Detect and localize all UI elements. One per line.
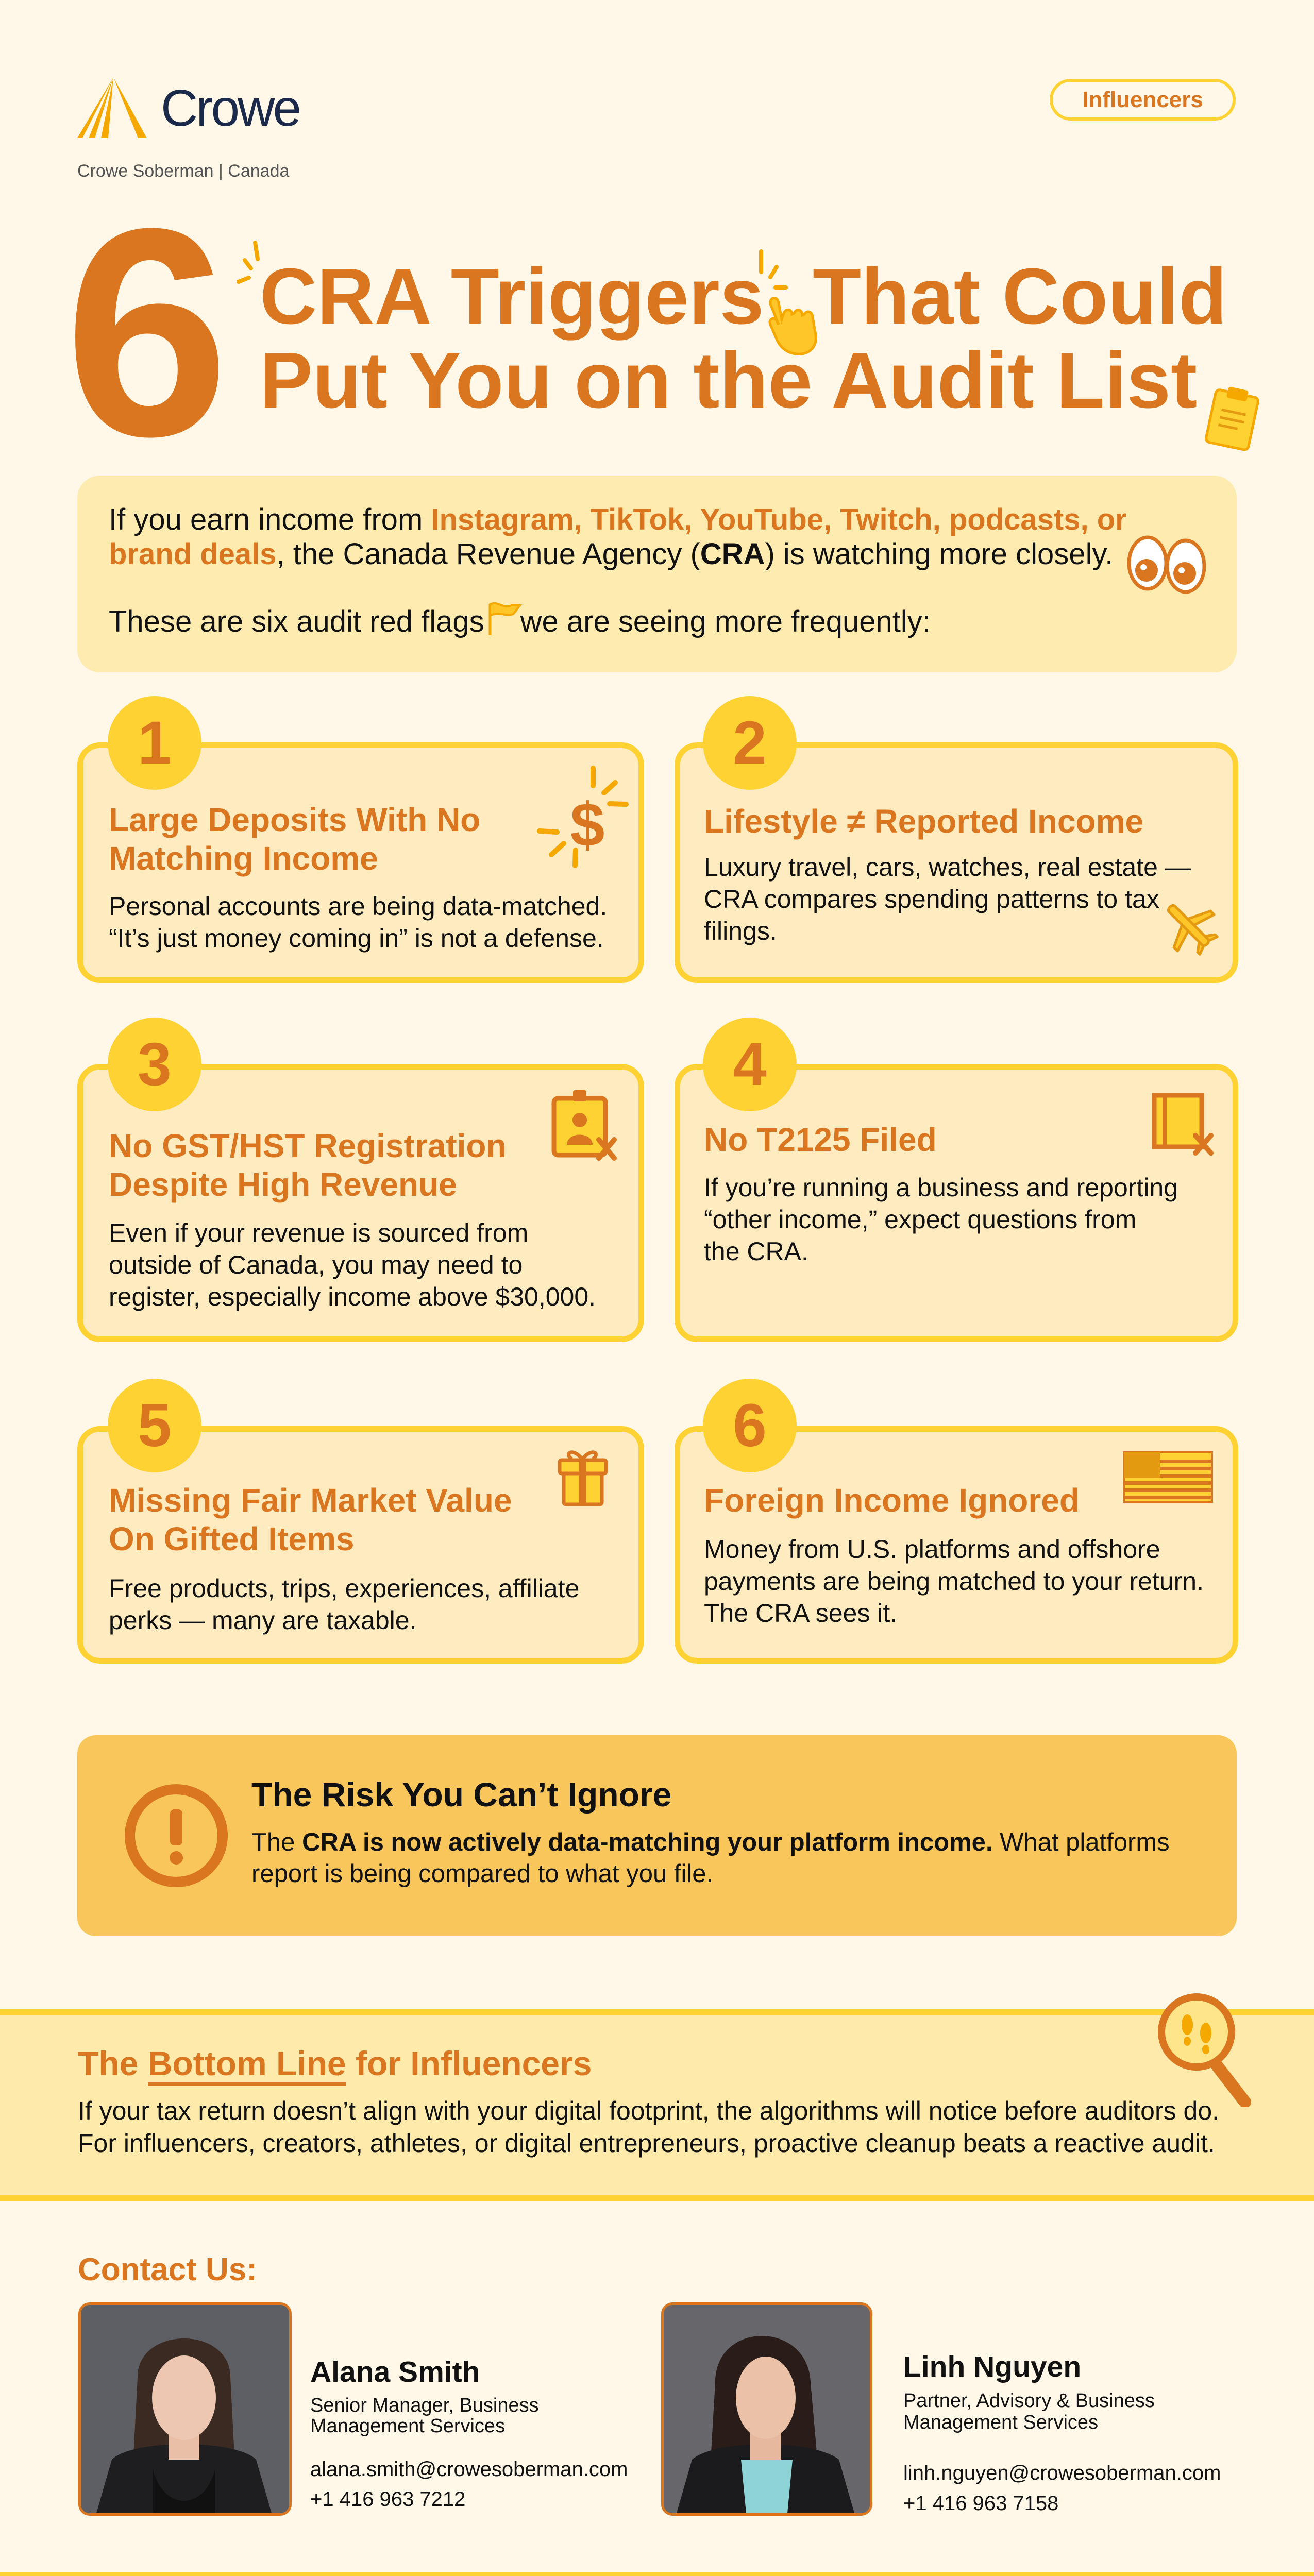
big number 6: 6	[64, 166, 229, 498]
panel: bottom line	[0, 2009, 1314, 2201]
contact: Alana Smith	[78, 2302, 645, 2516]
risk body: report is being compared to what you file.	[251, 1860, 713, 1888]
card 2 title: Lifestyle ≠ Reported Income	[704, 803, 1143, 840]
photo: Linh	[661, 2302, 872, 2516]
logo: Crowe	[77, 77, 299, 138]
panel: card 5	[77, 1426, 644, 1664]
card 1 body	[109, 892, 607, 953]
role Linh: Partner, Advisory & Business	[903, 2390, 1155, 2412]
badge 4: 4	[733, 1030, 767, 1098]
badge 4	[703, 1018, 797, 1111]
card 5 title: On Gifted Items	[109, 1520, 355, 1557]
contact details Alana: +1 416 963 7212	[310, 2488, 465, 2511]
name Linh: Linh Nguyen	[903, 2350, 1081, 2383]
card 1 title: Large Deposits With No	[109, 801, 480, 838]
card 6 title: Foreign Income Ignored	[704, 1482, 1080, 1519]
badge 6	[703, 1379, 797, 1472]
card 5 body	[109, 1574, 579, 1635]
badge 5	[108, 1379, 201, 1472]
card 1 body: Personal accounts are being data-matched.	[109, 892, 607, 921]
icon: document with x	[1152, 1093, 1214, 1156]
card 3 title: Despite High Revenue	[109, 1166, 457, 1203]
title line 2: Put You on the Audit List	[260, 336, 1197, 425]
badge 3: 3	[138, 1030, 172, 1098]
panel: card 4	[675, 1064, 1238, 1342]
card 6 body: The CRA sees it.	[704, 1599, 897, 1628]
card 1 title: Matching Income	[109, 840, 378, 877]
bottom line body: For influencers, creators, athletes, or digital entrepreneurs, proactive cleanup beats a reactive audit.	[78, 2129, 1215, 2158]
icon: magnifier with footprints	[1154, 1989, 1257, 2107]
tag: Influencers: Influencers	[1082, 87, 1203, 112]
badge 6: 6	[733, 1392, 767, 1460]
panel: card 6	[675, 1426, 1238, 1664]
card 3 body: register, especially income above $30,000.	[109, 1282, 596, 1311]
card 5 title: Missing Fair Market Value	[109, 1482, 512, 1519]
icon: clipboard	[1205, 387, 1259, 451]
name Alana: Alana Smith	[310, 2355, 480, 2388]
card 4 body: “other income,” expect questions from	[704, 1205, 1136, 1234]
role Alana: Senior Manager, Business	[310, 2395, 539, 2416]
card 6 body	[704, 1535, 1204, 1628]
card 3 body: outside of Canada, you may need to	[109, 1250, 523, 1279]
contact: Linh Nguyen	[661, 2302, 1254, 2516]
icon: airplane	[1167, 904, 1219, 956]
contact details Linh: linh.nguyen@crowesoberman.com	[903, 2462, 1221, 2484]
intro text: If you earn income from Instagram, TikTok, YouTube, Twitch, podcasts, or	[109, 503, 1127, 536]
card 3 title: No GST/HST Registration	[109, 1127, 507, 1164]
icon: exclamation circle	[125, 1784, 228, 1887]
icon: small flag	[488, 602, 522, 635]
icon: dollar sparkle: $	[570, 790, 604, 859]
intro line 2: These are six audit red flags we are seeing more frequently:	[109, 605, 931, 638]
card 6 body: payments are being matched to your return.	[704, 1567, 1204, 1596]
card 3 title	[109, 1127, 507, 1203]
badge 1	[108, 696, 201, 790]
card 5 body: perks — many are taxable.	[109, 1606, 416, 1635]
card 5 title	[109, 1482, 512, 1557]
risk heading: The Risk You Can’t Ignore	[251, 1775, 671, 1814]
card 2 body	[704, 853, 1191, 945]
contact details Linh: +1 416 963 7158	[903, 2492, 1058, 2515]
panel: card 2	[675, 742, 1238, 983]
role Alana	[310, 2395, 539, 2436]
contact details Alana: alana.smith@crowesoberman.com	[310, 2458, 628, 2481]
heading: contact us: Contact Us:	[78, 2252, 257, 2287]
icon: id badge with x	[551, 1090, 617, 1161]
card 2 body: CRA compares spending patterns to tax	[704, 885, 1159, 913]
card 5 body: Free products, trips, experiences, affiliate	[109, 1574, 579, 1603]
title	[64, 166, 1227, 498]
card 3 body	[109, 1218, 596, 1311]
card 1 title	[109, 801, 480, 877]
contact details Linh	[903, 2458, 1221, 2519]
icon: gift	[558, 1450, 608, 1506]
icon: eyes	[1127, 536, 1206, 594]
intro text: brand deals, the Canada Revenue Agency (CRA) is watching more closely.	[109, 537, 1113, 571]
role Linh: Management Services	[903, 2412, 1098, 2433]
photo: Alana	[78, 2302, 292, 2516]
card 4 body: the CRA.	[704, 1237, 808, 1266]
icon: US flag	[1123, 1451, 1213, 1503]
bottom line body	[78, 2095, 1219, 2160]
panel: card 1	[77, 742, 644, 983]
card 4 body: If you’re running a business and reporting	[704, 1173, 1178, 1202]
card 4 title: No T2125 Filed	[704, 1121, 937, 1158]
intro text	[109, 503, 1127, 571]
risk body: The CRA is now actively data-matching your platform income. What platforms	[251, 1828, 1170, 1856]
icon: pointing hand	[759, 249, 817, 355]
bottom line body: If your tax return doesn’t align with your digital footprint, the algorithms will notice before auditors do.	[78, 2096, 1219, 2125]
panel: card 3	[77, 1064, 644, 1342]
intro box	[77, 476, 1237, 672]
risk body	[251, 1828, 1170, 1888]
card 1 body: “It’s just money coming in” is not a defense.	[109, 924, 604, 953]
bottom line heading: The Bottom Line for Influencers	[78, 2044, 592, 2082]
card 6 body: Money from U.S. platforms and offshore	[704, 1535, 1160, 1564]
role Linh	[903, 2390, 1155, 2433]
contact details Alana	[310, 2454, 628, 2514]
card 2 body: Luxury travel, cars, watches, real estate —	[704, 853, 1191, 882]
badge 1: 1	[138, 709, 172, 777]
logo subtitle: Crowe Soberman | Canada	[77, 161, 289, 181]
badge 5: 5	[138, 1392, 172, 1460]
title line 1: CRA Triggers	[260, 252, 764, 341]
title: That Could	[813, 252, 1227, 341]
badge 2: 2	[733, 709, 767, 777]
icon: dollar sparkle	[537, 766, 629, 868]
logo: Crowe: Crowe	[161, 79, 299, 137]
icon: sparkle near CRA	[237, 241, 260, 284]
tag: Influencers	[1050, 79, 1236, 121]
badge 2	[703, 696, 797, 790]
card 2 body: filings.	[704, 917, 777, 945]
callout: risk	[77, 1735, 1237, 1936]
role Alana: Management Services	[310, 2415, 505, 2437]
card 3 body: Even if your revenue is sourced from	[109, 1218, 528, 1247]
badge 3	[108, 1018, 201, 1111]
card 4 body	[704, 1173, 1178, 1266]
